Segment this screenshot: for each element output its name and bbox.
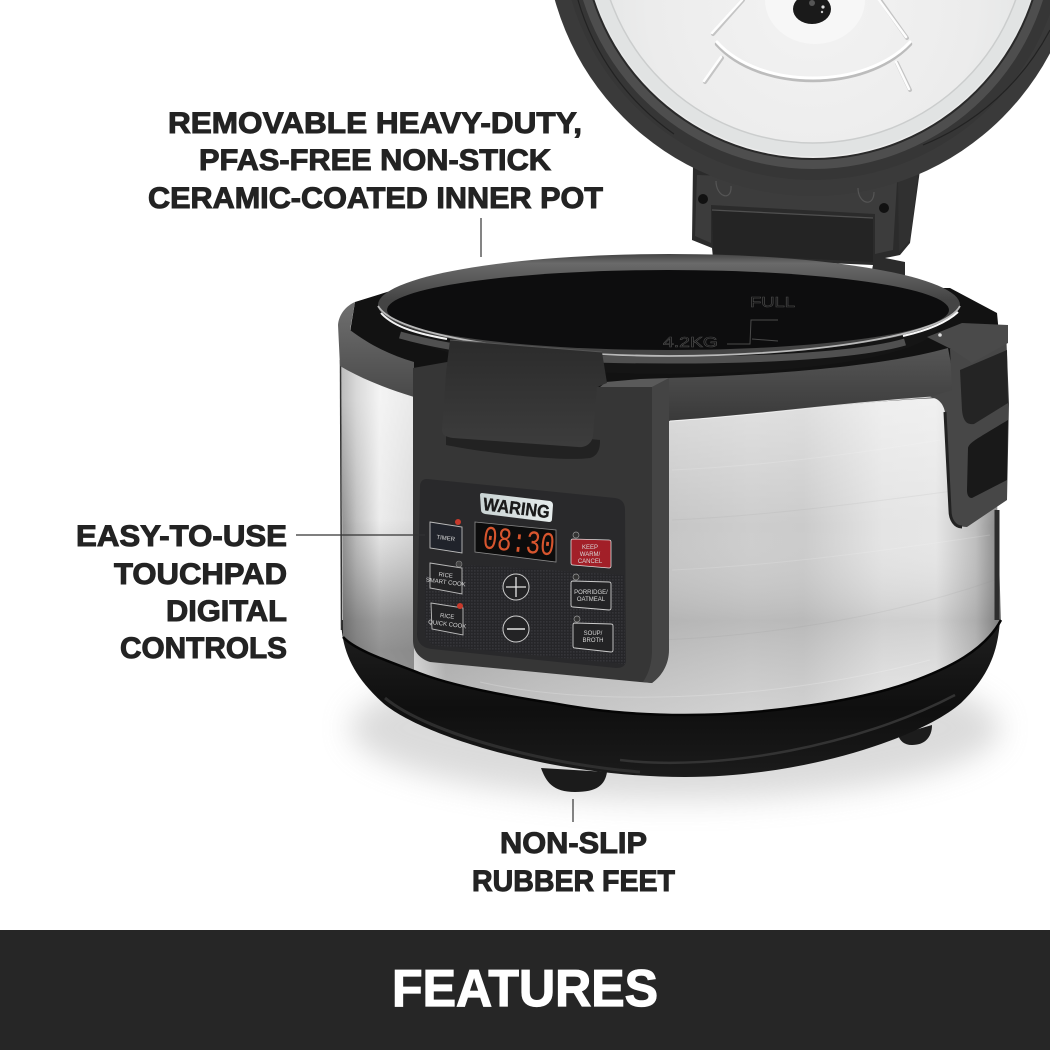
button: plus	[503, 574, 529, 600]
heading: feet label: RUBBER FEET	[472, 865, 675, 898]
button: soup broth: SOUP/	[584, 631, 603, 637]
inner pot	[378, 254, 960, 374]
footer banner: FEATURES	[392, 960, 658, 1018]
footer banner	[0, 930, 1050, 1050]
brand logo: WARING	[482, 494, 551, 522]
button: keep warm cancel: WARM/	[580, 552, 601, 558]
heading: touchpad label: TOUCHPAD	[114, 558, 287, 591]
inner pot markings: 4.2KG	[663, 334, 718, 351]
heading: touchpad label: EASY-TO-USE	[76, 520, 287, 553]
button: rice quick cook: QUICK COOK	[428, 620, 467, 630]
latch	[442, 340, 607, 459]
heading: touchpad label: CONTROLS	[120, 632, 287, 665]
button: rice quick cook	[428, 603, 467, 635]
heading: inner pot label	[148, 107, 603, 215]
button: keep warm cancel: KEEP	[582, 545, 598, 551]
heading: inner pot label: CERAMIC-COATED INNER POT	[148, 182, 603, 215]
button: rice quick cook: RICE	[440, 613, 455, 621]
floor shadow	[350, 656, 1000, 800]
button: soup broth: BROTH	[582, 638, 604, 644]
button: porridge oatmeal: OATMEAL	[577, 597, 606, 603]
base	[341, 620, 1000, 792]
heading: inner pot label: PFAS-FREE NON-STICK	[199, 144, 551, 177]
button: soup broth	[573, 616, 613, 652]
button: keep warm cancel: CANCEL	[578, 559, 603, 565]
callout: rubber feet	[472, 799, 675, 898]
digital display	[475, 521, 556, 565]
hinge notches	[716, 181, 874, 202]
steam vent	[793, 0, 831, 24]
heading: touchpad label	[76, 520, 287, 665]
collar band right	[668, 348, 958, 421]
open lid	[545, 0, 1050, 202]
heading: feet label: NON-SLIP	[500, 827, 647, 860]
side handle	[927, 323, 1009, 527]
stainless steel body	[340, 360, 1001, 715]
inner pot markings	[663, 294, 795, 351]
button: timer	[430, 519, 462, 553]
heading: inner pot label: REMOVABLE HEAVY-DUTY,	[168, 107, 582, 140]
heading: feet label	[472, 827, 675, 898]
button: rice smart cook	[425, 561, 466, 594]
collar band left	[338, 302, 414, 397]
lid ribs	[704, 0, 910, 90]
button: rice smart cook: RICE	[438, 572, 453, 580]
icon: rice cooker product illustration	[338, 0, 1050, 800]
inner pot markings: FULL	[750, 294, 795, 311]
button: keep warm cancel	[571, 532, 611, 568]
black recess behind pot	[350, 288, 1000, 392]
control column	[413, 362, 669, 683]
button: porridge oatmeal	[571, 574, 611, 610]
heading: touchpad label: DIGITAL	[166, 595, 287, 628]
lid hinge	[692, 165, 920, 280]
button: porridge oatmeal: PORRIDGE/	[574, 590, 608, 596]
control panel	[417, 479, 626, 668]
digital display: 08:30	[481, 521, 556, 565]
button: minus	[503, 616, 529, 642]
callout: inner pot	[148, 107, 603, 257]
button: rice smart cook: SMART COOK	[425, 578, 466, 588]
callout: touchpad controls	[76, 520, 425, 665]
button: timer: TIMER	[436, 535, 456, 543]
